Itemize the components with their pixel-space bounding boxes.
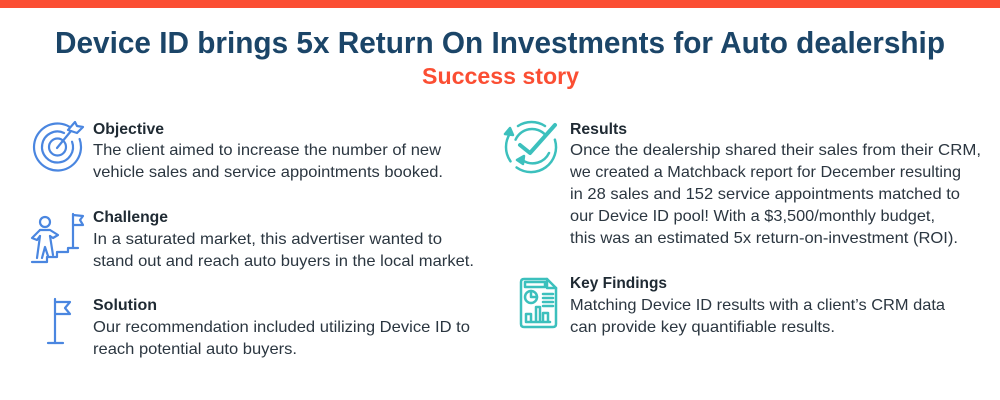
heading: solution: Solution: [93, 297, 157, 314]
text: results body: Once the dealership shared their sales from their CRM,: [570, 142, 981, 159]
text: objective body: [93, 142, 443, 181]
text: results body: we created a Matchback report for December resulting: [569, 164, 961, 181]
text: results body: in 28 sales and 152 service appointments matched to: [570, 186, 960, 203]
text: key findings body: [570, 297, 945, 336]
heading: challenge: Challenge: [93, 209, 168, 226]
text: results body: our Device ID pool! With a $3,500/monthly budget,: [570, 208, 935, 225]
text: objective body: vehicle sales and service appointments booked.: [93, 164, 443, 181]
text: solution body: [93, 319, 470, 358]
icon: flag: [48, 299, 70, 343]
text: solution body: reach potential auto buyers.: [93, 341, 297, 358]
icon: climber with flag: [32, 214, 83, 262]
title: Device ID brings 5x Return On Investments for Auto dealership: [55, 25, 945, 60]
icon: report document: [521, 279, 556, 327]
text: key findings body: Matching Device ID results with a client’s CRM data: [570, 297, 945, 314]
top accent bar: [0, 0, 1000, 8]
panel: results: [569, 121, 981, 247]
text: objective body: The client aimed to increase the number of new: [93, 142, 441, 159]
panel: key findings: [570, 275, 945, 336]
text: key findings body: can provide key quantifiable results.: [570, 319, 835, 336]
panel: objective: [93, 121, 443, 181]
heading: key findings: Key Findings: [570, 275, 667, 292]
text: challenge body: stand out and reach auto buyers in the local market.: [93, 253, 474, 270]
icon: target: [34, 122, 83, 171]
panel: solution: [93, 297, 470, 358]
text: solution body: Our recommendation included utilizing Device ID to: [93, 319, 470, 336]
text: challenge body: In a saturated market, this advertiser wanted to: [93, 231, 442, 248]
text: results body: [569, 142, 981, 247]
subtitle: Success story: [422, 63, 579, 89]
heading: objective: Objective: [93, 121, 164, 138]
icon: circular check: [505, 122, 556, 172]
heading: results: Results: [570, 121, 627, 138]
panel: challenge: [93, 209, 474, 270]
text: results body: this was an estimated 5x return-on-investment (ROI).: [570, 230, 958, 247]
text: challenge body: [93, 231, 474, 270]
